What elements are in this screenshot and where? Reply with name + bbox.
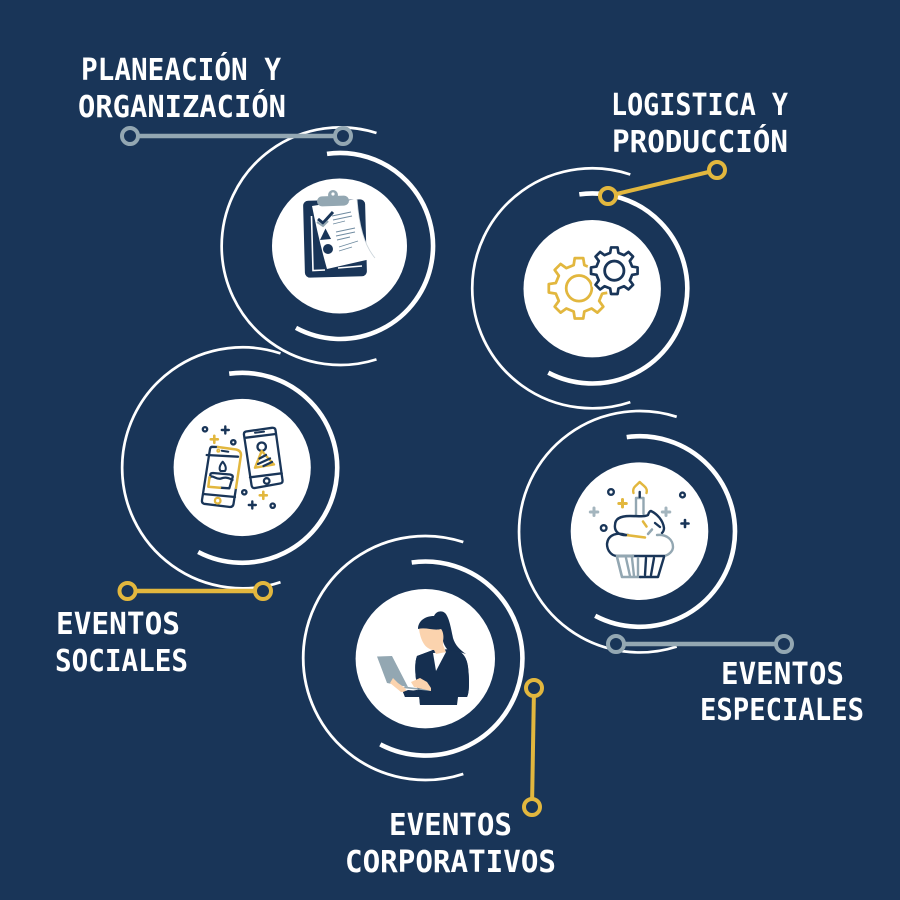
heading: eventos especiales	[700, 657, 864, 728]
icon: phones with party items	[202, 426, 283, 508]
heading: eventos especiales: ESPECIALES	[700, 693, 864, 728]
ring unit: planeacion	[222, 127, 433, 365]
heading: eventos corporativos: EVENTOS	[389, 808, 512, 843]
connector: eventos sociales	[120, 583, 271, 599]
heading: eventos sociales	[55, 607, 188, 679]
heading: logistica y produccion	[611, 88, 788, 160]
ring unit: logistica	[472, 168, 687, 408]
heading: logistica y produccion: LOGISTICA Y	[611, 88, 788, 123]
icon: woman with laptop	[377, 611, 469, 705]
ring unit: eventos especiales	[519, 411, 735, 652]
heading: planeacion y organizacion: PLANEACIÓN Y	[81, 51, 281, 88]
icon: clipboard checklist	[303, 190, 375, 278]
connector: logistica	[600, 162, 725, 204]
icon: cupcake with candle	[590, 482, 688, 577]
heading: planeacion y organizacion	[78, 51, 286, 125]
heading: eventos sociales: SOCIALES	[55, 644, 188, 679]
heading: eventos corporativos	[345, 808, 556, 880]
heading: eventos sociales: EVENTOS	[56, 607, 180, 642]
heading: eventos especiales: EVENTOS	[721, 657, 844, 692]
connector: planeacion	[122, 128, 351, 144]
icon: gears	[549, 247, 638, 318]
heading: logistica y produccion: PRODUCCIÓN	[612, 123, 788, 160]
connector: eventos especiales	[608, 636, 792, 652]
ring unit: eventos corporativos	[303, 536, 522, 780]
heading: planeacion y organizacion: ORGANIZACIÓN	[78, 88, 286, 125]
heading: eventos corporativos: CORPORATIVOS	[345, 845, 556, 880]
connector: eventos corporativos	[524, 680, 542, 815]
ring unit: eventos sociales	[122, 347, 337, 588]
